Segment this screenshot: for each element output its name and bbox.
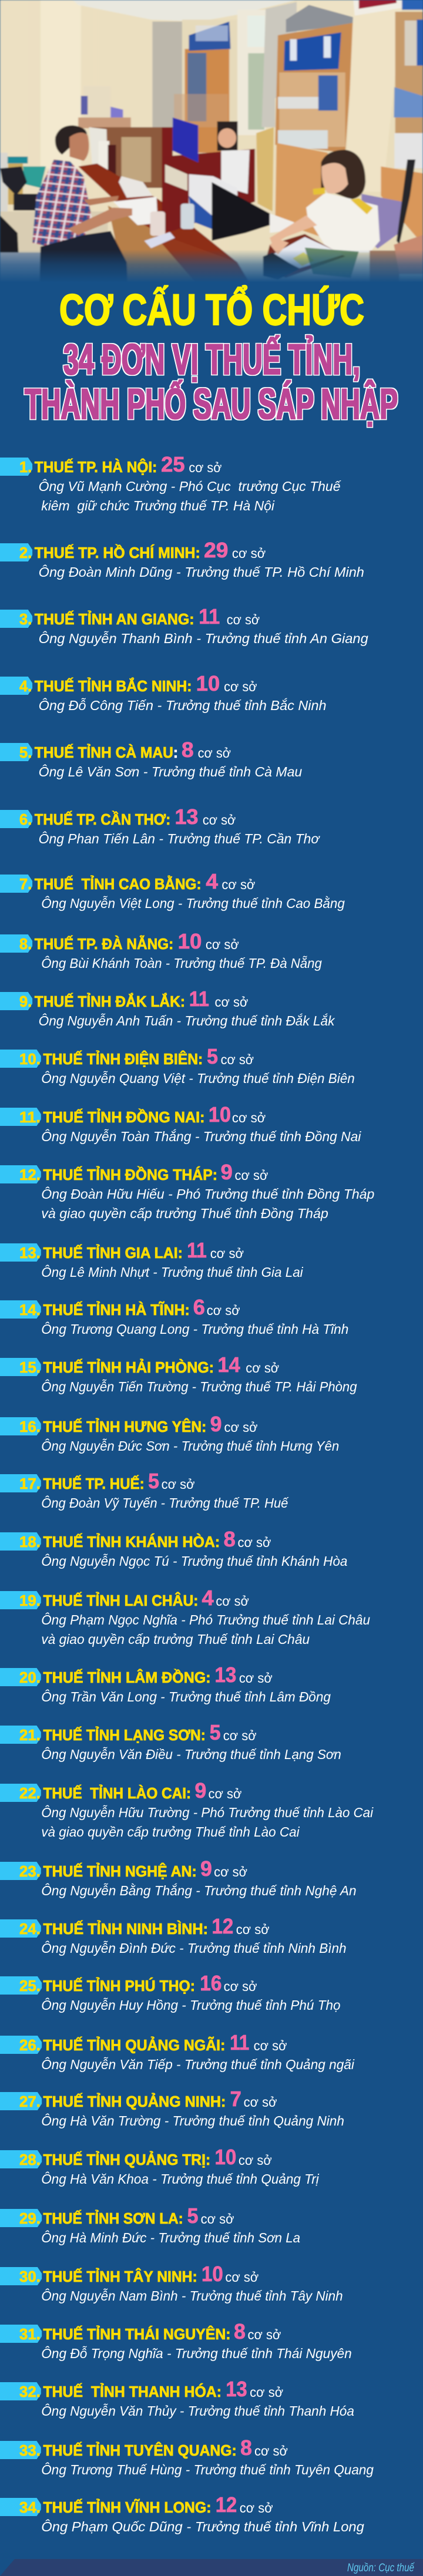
badge 4	[0, 677, 32, 695]
leader 12	[41, 1186, 374, 1221]
leader 19	[41, 1612, 370, 1647]
heading 26: 11	[230, 2031, 249, 2054]
badge 6	[0, 810, 32, 828]
heading 17: 5	[148, 1469, 159, 1493]
heading 13: 11	[187, 1239, 207, 1262]
heading 16: 9	[210, 1413, 221, 1436]
heading 10	[43, 1045, 254, 1068]
heading 29	[43, 2204, 234, 2228]
heading 14: THUẾ TỈNH HÀ TĨNH:	[43, 1302, 190, 1319]
leader 7: Ông Nguyễn Việt Long - Trưởng thuế tỉnh Cao Bằng	[41, 895, 345, 911]
badge 14	[0, 1300, 41, 1319]
heading 27	[43, 2087, 277, 2111]
badge 17: 17.	[19, 1476, 41, 1492]
heading 19: cơ sở	[216, 1593, 249, 1609]
heading 1: 25	[161, 453, 185, 476]
heading 32: THUẾ TỈNH THANH HÓA:	[43, 2383, 221, 2400]
item 2	[0, 539, 364, 580]
heading 27: 7	[230, 2087, 241, 2111]
item 33	[0, 2436, 374, 2477]
item 28	[0, 2145, 320, 2187]
leader 4: Ông Đỗ Công Tiến - Trưởng thuế tỉnh Bắc Ninh	[39, 697, 327, 713]
heading 18: cơ sở	[238, 1535, 271, 1550]
heading 24	[43, 1915, 270, 1938]
badge 11: 11.	[19, 1109, 41, 1126]
item 7	[0, 870, 345, 911]
heading 28: THUẾ TỈNH QUẢNG TRỊ:	[43, 2151, 210, 2168]
badge 33	[0, 2441, 41, 2459]
heading 31: cơ sở	[248, 2327, 281, 2342]
heading 12	[43, 1161, 268, 1184]
item 3	[0, 605, 368, 646]
heading 33: cơ sở	[254, 2443, 288, 2459]
heading 33: 8	[240, 2436, 252, 2460]
heading 10: THUẾ TỈNH ĐIỆN BIÊN:	[43, 1050, 203, 1068]
heading 2: 29	[204, 539, 228, 562]
heading 11: THUẾ TỈNH ĐỒNG NAI:	[43, 1108, 205, 1126]
badge 2: 2.	[19, 545, 32, 561]
item 13	[0, 1239, 304, 1280]
heading 15: THUẾ TỈNH HẢI PHÒNG:	[43, 1358, 214, 1376]
heading 19: THUẾ TỈNH LAI CHÂU:	[43, 1592, 198, 1609]
badge 13	[0, 1243, 41, 1262]
heading 34: cơ sở	[240, 2500, 273, 2516]
badge 13: 13.	[19, 1245, 41, 1262]
heading 16: cơ sở	[224, 1420, 258, 1435]
heading 12: 9	[221, 1161, 233, 1184]
badge 20: 20.	[19, 1670, 41, 1686]
heading 6: 13	[175, 805, 198, 829]
badge 29	[0, 2209, 42, 2227]
heading 32: 13	[226, 2377, 247, 2401]
badge 31: 31.	[19, 2326, 41, 2343]
badge 9: 9.	[19, 994, 32, 1010]
heading 5: cơ sở	[198, 745, 231, 761]
title	[25, 285, 398, 428]
leader 1: Ông Vũ Mạnh Cường - Phó Cục trưởng Cục Thuế	[39, 478, 341, 494]
item 27	[0, 2087, 344, 2128]
badge 3	[0, 610, 32, 628]
heading 32	[43, 2377, 283, 2401]
leader 12: Ông Đoàn Hữu Hiếu - Phó Trưởng thuế tỉnh Đồng Tháp	[41, 1186, 374, 1202]
badge 30	[0, 2267, 42, 2285]
heading 22: cơ sở	[208, 1786, 242, 1801]
badge 25: 25.	[19, 1978, 41, 1995]
item 19	[0, 1586, 370, 1647]
heading 2: THUẾ TP. HỒ CHÍ MINH:	[35, 544, 200, 561]
heading 29: 5	[187, 2204, 198, 2228]
leader 13: Ông Lê Minh Nhựt - Trưởng thuế tỉnh Gia Lai	[41, 1264, 304, 1280]
leader 5: Ông Lê Văn Sơn - Trưởng thuế tỉnh Cà Mau	[39, 764, 302, 779]
leader 18: Ông Nguyễn Ngọc Tú - Trưởng thuế tỉnh Khánh Hòa	[41, 1553, 347, 1569]
heading 4: THUẾ TỈNH BẮC NINH:	[35, 677, 192, 695]
item 9	[0, 987, 335, 1028]
heading 31: THUẾ TỈNH THÁI NGUYÊN:	[43, 2325, 231, 2343]
badge 10: 10.	[19, 1051, 41, 1068]
heading 1: cơ sở	[189, 460, 222, 475]
badge 26	[0, 2036, 42, 2054]
heading 10: 5	[207, 1045, 218, 1068]
heading 5: 8	[182, 738, 194, 762]
item 23	[0, 1857, 357, 1898]
heading 24: THUẾ TỈNH NINH BÌNH:	[43, 1921, 208, 1938]
heading 25: cơ sở	[224, 1979, 257, 1994]
heading 25	[43, 1972, 257, 1995]
leader 22	[41, 1804, 374, 1839]
heading 9: THUẾ TỈNH ĐẮK LẮK:	[35, 993, 185, 1010]
leader 27: Ông Hà Văn Trường - Trưởng thuế tỉnh Quảng Ninh	[41, 2113, 344, 2128]
heading 24: cơ sở	[236, 1922, 270, 1937]
badge 4: 4.	[19, 678, 32, 695]
item 11	[0, 1103, 362, 1144]
heading 20: THUẾ TỈNH LÂM ĐỒNG:	[43, 1669, 211, 1686]
heading 30: cơ sở	[225, 2269, 259, 2285]
badge 9	[0, 992, 32, 1010]
heading 34: THUẾ TỈNH VĨNH LONG:	[43, 2499, 212, 2516]
badge 18	[0, 1532, 41, 1551]
badge 5: 5.	[19, 745, 32, 761]
item 6	[0, 805, 321, 846]
item 20	[0, 1663, 331, 1704]
leader 21: Ông Nguyễn Văn Điều - Trưởng thuế tỉnh Lạng Sơn	[41, 1746, 341, 1762]
leader 19: Ông Phạm Ngọc Nghĩa - Phó Trưởng thuế tỉnh Lai Châu	[41, 1612, 370, 1627]
badge 8: 8.	[19, 936, 32, 953]
leader 9: Ông Nguyễn Anh Tuấn - Trưởng thuế tỉnh Đắk Lắk	[39, 1013, 335, 1028]
heading 34	[43, 2493, 273, 2517]
heading 24: 12	[212, 1915, 233, 1938]
heading 27: THUẾ TỈNH QUẢNG NINH:	[43, 2093, 226, 2110]
item 8	[0, 930, 322, 971]
badge 30: 30.	[19, 2269, 41, 2285]
heading 17	[43, 1469, 195, 1493]
item 26	[0, 2031, 355, 2072]
heading 13: cơ sở	[210, 1246, 244, 1261]
badge 21: 21.	[19, 1727, 41, 1744]
item 25	[0, 1972, 341, 2013]
item 12	[0, 1161, 374, 1221]
heading 14	[43, 1296, 240, 1319]
heading 26: THUẾ TỈNH QUẢNG NGÃI:	[43, 2037, 225, 2054]
item 4	[0, 672, 327, 713]
item 5	[0, 738, 302, 779]
badge 19	[0, 1591, 41, 1609]
heading 12: THUẾ TỈNH ĐỒNG THÁP:	[43, 1166, 217, 1183]
badge 32	[0, 2382, 41, 2400]
heading 8: 10	[178, 930, 202, 953]
heading 13: THUẾ TỈNH GIA LAI:	[43, 1245, 183, 1262]
heading 13	[43, 1239, 244, 1262]
heading 30: 10	[202, 2262, 223, 2286]
leader 1: kiêm giữ chức Trưởng thuế TP. Hà Nội	[41, 498, 275, 513]
badge 34	[0, 2498, 41, 2516]
heading 33	[43, 2436, 288, 2460]
badge 21	[0, 1726, 41, 1744]
heading 9	[35, 987, 249, 1011]
heading 29: cơ sở	[201, 2211, 234, 2227]
heading 28: cơ sở	[239, 2153, 272, 2168]
badge 3: 3.	[19, 611, 32, 628]
heading 23: 9	[200, 1857, 212, 1881]
heading 21: 5	[210, 1721, 221, 1744]
heading 17: THUẾ TP. HUẾ:	[43, 1475, 145, 1492]
heading 9: cơ sở	[215, 994, 249, 1010]
badge 29: 29.	[19, 2211, 41, 2227]
item 17	[0, 1469, 289, 1511]
heading 5	[35, 738, 231, 762]
badge 8	[0, 934, 32, 953]
heading 32: cơ sở	[250, 2385, 283, 2400]
heading 31: 8	[234, 2320, 246, 2343]
heading 3: cơ sở	[227, 612, 260, 627]
photo: tax office service counter	[0, 0, 423, 294]
heading 10: cơ sở	[221, 1052, 254, 1067]
heading 27: cơ sở	[244, 2094, 277, 2110]
heading 6: cơ sở	[203, 812, 236, 828]
heading 8	[35, 930, 239, 953]
item 32	[0, 2377, 354, 2419]
heading 33: THUẾ TỈNH TUYÊN QUANG:	[43, 2442, 237, 2459]
heading 11	[43, 1103, 266, 1126]
heading 16: THUẾ TỈNH HƯNG YÊN:	[43, 1418, 206, 1435]
leader 12: và giao quyền cấp trưởng Thuế tỉnh Đồng Tháp	[41, 1206, 328, 1221]
heading 7	[35, 870, 256, 893]
badge 22: 22.	[19, 1785, 41, 1802]
leader 28: Ông Hà Văn Khoa - Trưởng thuế tỉnh Quảng Trị	[41, 2171, 320, 2187]
item 22	[0, 1779, 374, 1839]
leader 1	[39, 478, 341, 513]
badge 27: 27.	[19, 2094, 41, 2110]
badge 23	[0, 1862, 41, 1880]
leader 20: Ông Trần Văn Long - Trưởng thuế tỉnh Lâm Đồng	[41, 1689, 331, 1704]
heading 8: THUẾ TP. ĐÀ NẴNG:	[35, 936, 173, 953]
heading 21: cơ sở	[223, 1728, 257, 1743]
leader 8: Ông Bùi Khánh Toàn - Trưởng thuế TP. Đà Nẵng	[41, 955, 322, 971]
heading 3	[35, 605, 260, 628]
badge 23: 23.	[19, 1864, 41, 1880]
leader 30: Ông Nguyễn Nam Bình - Trưởng thuế tỉnh Tây Ninh	[41, 2288, 343, 2303]
badge 11	[0, 1108, 41, 1126]
badge 33: 33.	[19, 2443, 41, 2459]
badge 32: 32.	[19, 2384, 41, 2400]
item 16	[0, 1413, 339, 1454]
footer band	[0, 2559, 423, 2576]
heading 31	[43, 2320, 281, 2343]
heading 12: cơ sở	[234, 1168, 268, 1183]
heading 23	[43, 1857, 247, 1881]
heading 7: 4	[206, 870, 219, 893]
badge 14: 14.	[19, 1302, 41, 1319]
badge 15: 15.	[19, 1360, 41, 1376]
heading 3: THUẾ TỈNH AN GIANG:	[35, 611, 194, 628]
heading 25: THUẾ TỈNH PHÚ THỌ:	[43, 1977, 195, 1995]
heading 18	[43, 1528, 271, 1551]
item 34	[0, 2493, 364, 2534]
heading 5: THUẾ TỈNH CÀ MAU :	[35, 744, 178, 761]
heading 22: 9	[195, 1779, 206, 1802]
heading 26: cơ sở	[254, 2038, 287, 2053]
badge 10	[0, 1050, 41, 1068]
leader 29: Ông Hà Minh Đức - Trưởng thuế tỉnh Sơn La	[41, 2229, 300, 2245]
heading 2: cơ sở	[232, 546, 266, 561]
heading 16	[43, 1413, 258, 1436]
leader 23: Ông Nguyễn Bằng Thắng - Trưởng thuế tỉnh Nghệ An	[41, 1882, 357, 1898]
badge 12	[0, 1165, 41, 1183]
heading 28: 10	[215, 2145, 236, 2169]
heading 25: 16	[200, 1972, 221, 1995]
item 21	[0, 1721, 341, 1762]
leader 22: và giao quyền cấp trưởng Thuế tỉnh Lào Cai	[41, 1824, 300, 1839]
heading 3: 11	[199, 605, 220, 628]
badge 24: 24.	[19, 1921, 41, 1938]
heading 34: 12	[216, 2493, 237, 2517]
leader 33: Ông Trương Thuế Hùng - Trưởng thuế tỉnh Tuyên Quang	[41, 2461, 374, 2477]
heading 20: cơ sở	[239, 1670, 273, 1686]
badge 12: 12.	[19, 1167, 41, 1183]
badge 25	[0, 1976, 42, 1995]
heading 19	[43, 1586, 249, 1610]
badge 1	[0, 458, 32, 476]
badge 34: 34.	[19, 2500, 41, 2516]
heading 18: THUẾ TỈNH KHÁNH HÒA:	[43, 1533, 220, 1551]
item 10	[0, 1045, 355, 1086]
badge 27	[0, 2092, 42, 2110]
heading 18: 8	[224, 1528, 236, 1551]
badge 28	[0, 2150, 42, 2168]
leader 24: Ông Nguyễn Đình Đức - Trưởng thuế tỉnh Ninh Bình	[41, 1940, 347, 1956]
heading 21: THUẾ TỈNH LẠNG SƠN:	[43, 1727, 206, 1744]
heading 4: cơ sở	[224, 679, 257, 694]
heading 6	[35, 805, 236, 829]
leader 32: Ông Nguyễn Văn Thủy - Trưởng thuế tỉnh Thanh Hóa	[41, 2403, 354, 2419]
heading 20	[43, 1663, 273, 1687]
badge 16: 16.	[19, 1419, 41, 1435]
badge 6: 6.	[19, 812, 32, 828]
heading 4	[35, 672, 257, 695]
leader 17: Ông Đoàn Vỹ Tuyến - Trưởng thuế TP. Huế	[41, 1495, 289, 1511]
heading 7: cơ sở	[221, 877, 256, 892]
leader 15: Ông Nguyễn Tiến Trường - Trưởng thuế TP. Hải Phòng	[41, 1378, 357, 1394]
heading 4: 10	[196, 672, 220, 695]
badge 1: 1.	[19, 459, 32, 476]
heading 8: cơ sở	[206, 937, 239, 952]
heading 15: 14	[218, 1353, 240, 1377]
heading 19: 4	[202, 1586, 214, 1610]
heading 23: cơ sở	[214, 1864, 247, 1879]
badge 18: 18.	[19, 1534, 41, 1551]
photo fade into background	[0, 250, 423, 300]
leader 26: Ông Nguyễn Văn Tiếp - Trưởng thuế tỉnh Quảng ngãi	[41, 2056, 355, 2072]
heading 17: cơ sở	[162, 1477, 195, 1492]
leader 11: Ông Nguyễn Toàn Thắng - Trưởng thuế tỉnh Đồng Nai	[41, 1128, 362, 1144]
heading 15	[43, 1353, 280, 1377]
badge 7: 7.	[19, 876, 32, 893]
item 18	[0, 1528, 347, 1569]
badge 20	[0, 1668, 41, 1686]
badge 24	[0, 1919, 41, 1938]
heading 20: 13	[215, 1663, 236, 1687]
heading 1: THUẾ TP. HÀ NỘI:	[35, 458, 157, 476]
heading 28	[43, 2145, 272, 2169]
item 29	[0, 2204, 300, 2245]
heading 15: cơ sở	[246, 1360, 280, 1376]
heading 21	[43, 1721, 257, 1744]
leader 19: và giao quyền cấp trưởng Thuế tỉnh Lai Châu	[41, 1632, 310, 1647]
badge 22	[0, 1784, 41, 1802]
badge 16	[0, 1417, 41, 1435]
heading 30: THUẾ TỈNH TÂY NINH:	[43, 2268, 197, 2285]
leader 14: Ông Trương Quang Long - Trưởng thuế tỉnh Hà Tĩnh	[41, 1321, 348, 1337]
item 15	[0, 1353, 357, 1394]
heading 11: cơ sở	[232, 1110, 266, 1125]
heading 26	[43, 2031, 287, 2054]
badge 5	[0, 743, 32, 761]
heading 11: 10	[209, 1103, 231, 1126]
heading 9: 11	[189, 987, 209, 1011]
leader 16: Ông Nguyễn Đức Sơn - Trưởng thuế tỉnh Hưng Yên	[41, 1438, 339, 1454]
badge 28: 28.	[19, 2152, 41, 2168]
badge 2	[0, 543, 32, 561]
badge 15	[0, 1358, 41, 1376]
leader 2: Ông Đoàn Minh Dũng - Trưởng thuế TP. Hồ Chí Minh	[39, 564, 364, 580]
leader 22: Ông Nguyễn Hữu Trường - Phó Trưởng thuế tỉnh Lào Cai	[41, 1804, 374, 1820]
item 1	[0, 453, 341, 513]
badge 19: 19.	[19, 1593, 41, 1609]
heading 7: THUẾ TỈNH CAO BẰNG:	[35, 875, 202, 893]
heading 22: THUẾ TỈNH LÀO CAI:	[43, 1785, 191, 1802]
heading 6: THUẾ TP. CẦN THƠ:	[35, 811, 170, 828]
heading 2	[35, 539, 266, 562]
leader 10: Ông Nguyễn Quang Việt - Trưởng thuế tỉnh Điện Biên	[41, 1070, 355, 1086]
heading 14: 6	[193, 1296, 205, 1319]
badge 26: 26.	[19, 2037, 41, 2054]
leader 3: Ông Nguyễn Thanh Bình - Trưởng thuế tỉnh An Giang	[39, 630, 368, 646]
heading 30	[43, 2262, 259, 2286]
heading 22	[43, 1779, 242, 1802]
leader 6: Ông Phan Tiến Lân - Trưởng thuế TP. Cần Thơ	[39, 830, 321, 846]
leader 25: Ông Nguyễn Huy Hồng - Trưởng thuế tỉnh Phú Thọ	[41, 1997, 341, 2013]
heading 29: THUẾ TỈNH SƠN LA:	[43, 2210, 183, 2227]
item 31	[0, 2320, 352, 2361]
item 14	[0, 1296, 348, 1337]
item 30	[0, 2262, 343, 2303]
leader 34: Ông Phạm Quốc Dũng - Trưởng thuế tỉnh Vĩnh Long	[41, 2518, 364, 2534]
heading 1	[35, 453, 222, 476]
badge 7	[0, 875, 32, 893]
heading 23: THUẾ TỈNH NGHỆ AN:	[43, 1862, 197, 1880]
leader 31: Ông Đỗ Trọng Nghĩa - Trưởng thuế tỉnh Thái Nguyên	[41, 2345, 352, 2361]
badge 17	[0, 1474, 41, 1492]
heading 14: cơ sở	[207, 1303, 240, 1318]
item 24	[0, 1915, 347, 1956]
badge 31	[0, 2325, 42, 2343]
